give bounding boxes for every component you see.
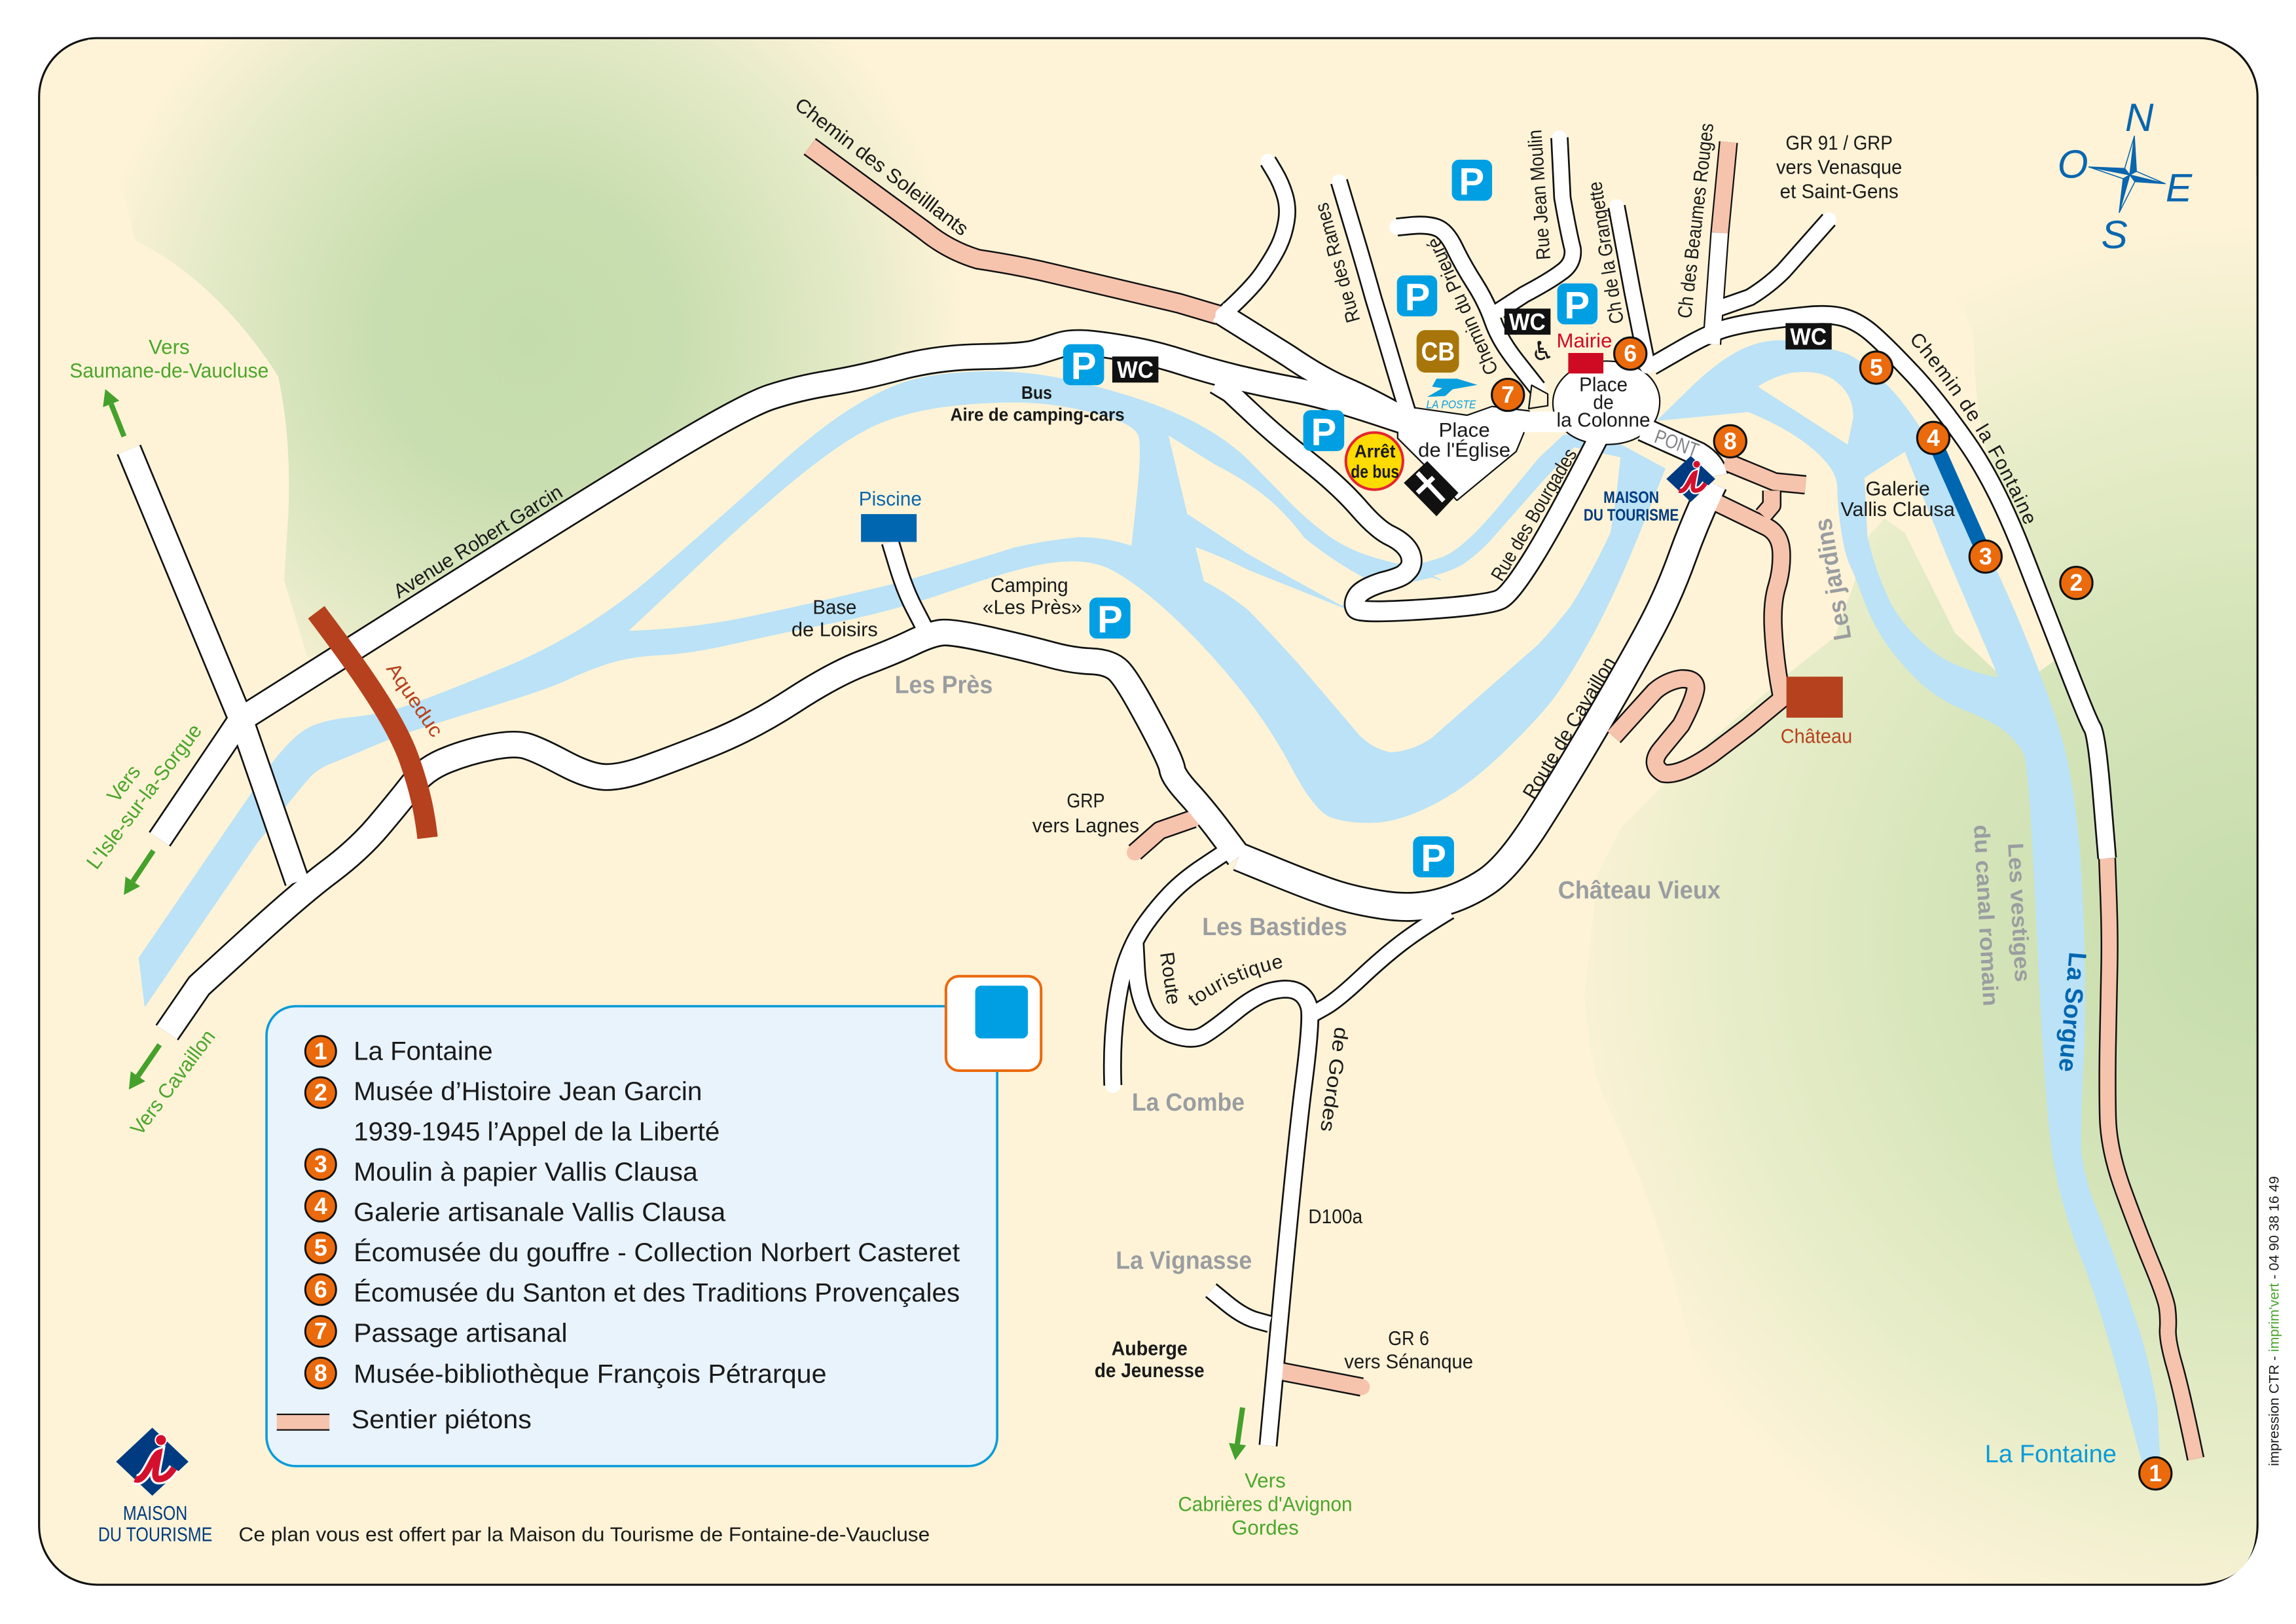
road and path labels: de Gordes — [1316, 1025, 1352, 1133]
road and path labels: Avenue Robert Garcin — [390, 481, 566, 602]
icon: bus stop: Arrêt — [1355, 441, 1395, 461]
district labels: Les Bastides — [1202, 913, 1347, 941]
numbered markers on map: 5 — [1870, 354, 1883, 380]
river labels: La Fontaine — [1985, 1441, 2117, 1468]
galerie path bar — [1933, 438, 1986, 557]
place and site labels: GR 91 / GRP — [1786, 133, 1893, 155]
district labels: La Vignasse — [1116, 1247, 1252, 1275]
icon: cash machine CB: CB — [1421, 337, 1455, 366]
numbered markers on map: 8 — [1724, 428, 1737, 454]
direction labels: Vers Cavaillon — [126, 1025, 220, 1139]
icon: tourist office small — [1666, 456, 1715, 502]
legend entry 2 — [305, 1077, 720, 1146]
district labels: Château Vieux — [1558, 877, 1721, 904]
chateau building — [1787, 676, 1843, 718]
place and site labels: vers Lagnes — [1032, 815, 1139, 837]
logo: Maison du Tourisme: DU TOURISME — [98, 1524, 212, 1545]
place and site labels: MAISON — [1603, 489, 1659, 507]
logo: Maison du Tourisme: MAISON — [123, 1503, 187, 1524]
legend entry 8: Musée-bibliothèque François Pétrarque — [354, 1359, 827, 1388]
road and path labels: Chemin des Soleilllants — [791, 94, 972, 240]
place and site labels: de Jeunesse — [1095, 1360, 1205, 1382]
legend entry 3: Moulin à papier Vallis Clausa — [354, 1157, 698, 1187]
place and site labels: la Colonne — [1557, 409, 1650, 431]
direction labels: Vers — [1245, 1469, 1286, 1492]
direction arrow: L'Isle-sur-la-Sorgue — [124, 851, 153, 895]
district labels: Les Près — [895, 672, 993, 699]
direction arrow: Saumane — [103, 389, 124, 437]
parking icons: P — [1459, 160, 1484, 203]
place and site labels: Vallis Clausa — [1840, 499, 1955, 521]
icon: bus stop — [1346, 432, 1403, 490]
place and site labels: vers Venasque — [1776, 157, 1902, 179]
legend entry: footpath: Sentier piétons — [352, 1405, 532, 1434]
place and site labels: de — [1593, 392, 1614, 414]
place and site labels: de l'Église — [1418, 439, 1510, 461]
place and site labels: vers Sénanque — [1344, 1352, 1473, 1373]
icon: cash machine CB — [1417, 330, 1459, 373]
place and site labels: Place — [1579, 375, 1628, 396]
place and site labels: de Loisirs — [792, 619, 878, 640]
icon: bus stop: de bus — [1351, 462, 1399, 482]
legend panel — [266, 976, 1041, 1466]
district labels: Les jardins — [1810, 516, 1857, 642]
place and site labels: Piscine — [859, 489, 922, 510]
road and path labels: Chemin de la Fontaine — [1912, 334, 2033, 524]
road and path labels: D100a — [1308, 1206, 1362, 1228]
river labels: La Sorgue — [2053, 951, 2091, 1073]
parking icons: P — [1097, 599, 1123, 641]
direction labels: L'Isle-sur-la-Sorgue — [82, 720, 206, 874]
place and site labels: «Les Près» — [983, 597, 1082, 619]
numbered markers on map: 7 — [1501, 382, 1514, 408]
road and path labels: Chemin du Prieuré — [1423, 234, 1503, 378]
legend entry 1: La Fontaine — [354, 1036, 493, 1065]
compass rose: E — [2166, 165, 2193, 210]
legend entry 6: Écomusée du Santon et des Traditions Provençales — [354, 1278, 960, 1307]
place and site labels: DU TOURISME — [1584, 507, 1679, 525]
place and site labels: Camping — [991, 575, 1068, 597]
green hill north-west — [88, 39, 1025, 657]
mairie building — [1568, 353, 1603, 373]
legend entry 6: 6 — [314, 1276, 327, 1302]
compass rose: N — [2125, 95, 2154, 139]
numbered markers on map: 1 — [2149, 1460, 2162, 1486]
legend entry 2: 1939-1945 l’Appel de la Liberté — [354, 1116, 720, 1146]
direction labels — [69, 336, 1353, 1539]
legend entry 5: Écomusée du gouffre - Collection Norbert Casteret — [354, 1238, 960, 1267]
place and site labels: et Saint-Gens — [1780, 181, 1899, 203]
icon: La Poste — [1426, 378, 1478, 411]
parking icons: P — [1564, 284, 1590, 327]
numbered markers on map — [1492, 337, 2172, 1490]
district labels: Les vestiges — [2003, 842, 2034, 982]
road and path labels: Ch des Beaumes Rouges — [1674, 122, 1718, 320]
WC icons: WC — [1117, 357, 1154, 383]
legend tab: parking key — [946, 976, 1041, 1071]
legend entry 3: 3 — [314, 1151, 327, 1177]
road network — [129, 138, 2196, 1459]
aqueduct — [316, 612, 428, 838]
road and path labels: PONT — [1652, 426, 1702, 462]
legend entry 4: 4 — [314, 1193, 327, 1219]
place and site labels: GRP — [1066, 790, 1105, 812]
legend entry 3 — [305, 1149, 698, 1187]
icon: La Poste: LA POSTE — [1426, 397, 1476, 411]
place and site labels: Mairie — [1557, 331, 1613, 352]
district labels: du canal romain — [1969, 824, 2003, 1006]
legend entry 2: 2 — [314, 1080, 327, 1106]
place and site labels: Aire de camping-cars — [951, 404, 1125, 424]
numbered markers on map: 3 — [1979, 544, 1992, 570]
footer credit: Ce plan vous est offert par la Maison du Tourisme de Fontaine-de-Vaucluse — [239, 1524, 930, 1545]
district labels: La Combe — [1132, 1089, 1245, 1116]
legend entry 8: 8 — [314, 1360, 327, 1386]
river labels — [1985, 951, 2117, 1468]
logo: Maison du Tourisme — [98, 1428, 212, 1545]
icon: wheelchair: ♿ — [1531, 337, 1554, 367]
road and path labels: Ch de la Grangette — [1584, 180, 1628, 325]
direction labels: Vers — [149, 336, 190, 359]
place and site labels: Galerie — [1865, 479, 1930, 500]
green hill south-east — [1584, 175, 2257, 1583]
parking icons — [1063, 160, 1597, 879]
place and site labels: Auberge — [1112, 1338, 1188, 1359]
parking icons: P — [1405, 276, 1430, 319]
icon: church — [1404, 461, 1459, 516]
WC icons — [1112, 308, 1832, 383]
legend entry 2: Musée d’Histoire Jean Garcin — [354, 1077, 702, 1106]
direction labels: Cabrières d'Avignon — [1178, 1493, 1353, 1516]
direction arrow: Cavaillon — [129, 1044, 160, 1090]
legend entry: footpath — [277, 1405, 532, 1434]
place and site labels: Base — [812, 597, 856, 619]
parking icons: P — [1311, 411, 1336, 453]
legend entry 7: 7 — [314, 1318, 327, 1344]
numbered markers on map: 6 — [1624, 341, 1637, 367]
district labels — [895, 516, 2034, 1275]
printer credit: impression CTR - imprim'vert - 04 90 38 16 49 — [2266, 1176, 2282, 1466]
numbered markers on map: 2 — [2070, 570, 2083, 596]
place and site labels: Château — [1781, 726, 1852, 748]
WC icons: WC — [1790, 323, 1827, 350]
legend entry 4: Galerie artisanale Vallis Clausa — [354, 1197, 726, 1227]
road and path labels: Rue des Bourgades — [1487, 445, 1581, 585]
place and site labels: GR 6 — [1388, 1328, 1429, 1350]
direction labels: Gordes — [1231, 1516, 1299, 1539]
compass rose: O — [2058, 142, 2088, 187]
road and path labels: touristique — [1188, 957, 1282, 1006]
road and path labels: Route de Cavaillon — [1519, 654, 1620, 803]
direction labels: Vers — [102, 761, 145, 807]
road and path labels: Rue Jean Moulin — [1524, 129, 1555, 261]
place and site labels: Place — [1438, 420, 1490, 441]
direction labels: Saumane-de-Vaucluse — [69, 359, 268, 382]
river La Sorgue — [139, 341, 2160, 1462]
parking icons: P — [1071, 345, 1096, 388]
legend entry 5: 5 — [314, 1235, 327, 1261]
place and site labels: Aqueduc — [382, 659, 447, 741]
road and path labels: Rue des Rames — [1311, 200, 1364, 325]
direction arrow: Cabrieres — [1229, 1407, 1246, 1460]
road and path labels: Route — [1156, 951, 1184, 1006]
compass rose — [2058, 95, 2193, 257]
compass rose: S — [2102, 212, 2128, 257]
piscine building — [861, 514, 917, 542]
parking icons: P — [1421, 837, 1446, 879]
place and site labels — [382, 133, 1955, 1382]
legend entry 7: Passage artisanal — [354, 1318, 568, 1348]
legend entry 1: 1 — [314, 1038, 327, 1064]
road and path labels — [390, 94, 2033, 1228]
place and site labels: Bus — [1021, 382, 1052, 403]
numbered markers on map: 4 — [1927, 425, 1940, 451]
WC icons: WC — [1509, 309, 1546, 335]
